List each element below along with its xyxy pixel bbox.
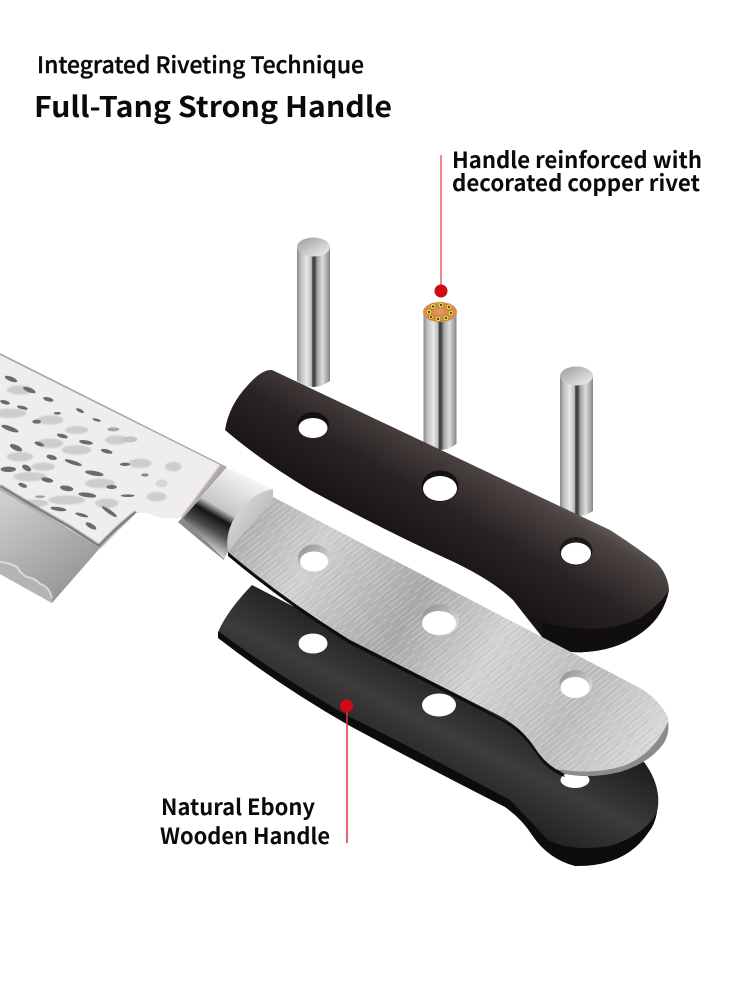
hole: upper handle 1 (297, 412, 329, 438)
bolster (183, 468, 273, 559)
lower blade bevel (0, 487, 100, 603)
callout: natural ebony handle (160, 700, 353, 851)
blade heel tang (178, 517, 226, 560)
rivet: decorated copper centre (423, 302, 457, 450)
hole: lower handle 2 (422, 694, 456, 716)
rivet: right (560, 366, 593, 516)
callout: natural ebony handle: Wooden Handle (160, 819, 330, 851)
hammered blade face (0, 353, 227, 549)
title: Full-Tang Strong Handle (34, 85, 392, 126)
hole: steel 3 (560, 670, 592, 698)
lower ebony handle scale (218, 585, 658, 866)
hole: upper handle 3 (560, 537, 592, 565)
hole: upper handle 2 (422, 470, 458, 502)
callout: copper rivet (434, 143, 702, 298)
callout: copper rivet: Handle reinforced with (452, 143, 702, 175)
hole: steel 1 (298, 544, 330, 572)
full-tang steel core (228, 497, 668, 777)
upper ebony handle scale (225, 370, 669, 652)
rivet: left (297, 238, 330, 387)
callout: natural ebony handle: Natural Ebony (161, 790, 315, 822)
hole: lower handle 1 (298, 634, 328, 654)
hole: lower handle 3 (560, 772, 590, 788)
hole: steel 2 (421, 604, 459, 636)
callout: copper rivet: decorated copper rivet (452, 166, 701, 198)
knife blade (0, 353, 273, 603)
subtitle: Integrated Riveting Technique (37, 48, 364, 80)
